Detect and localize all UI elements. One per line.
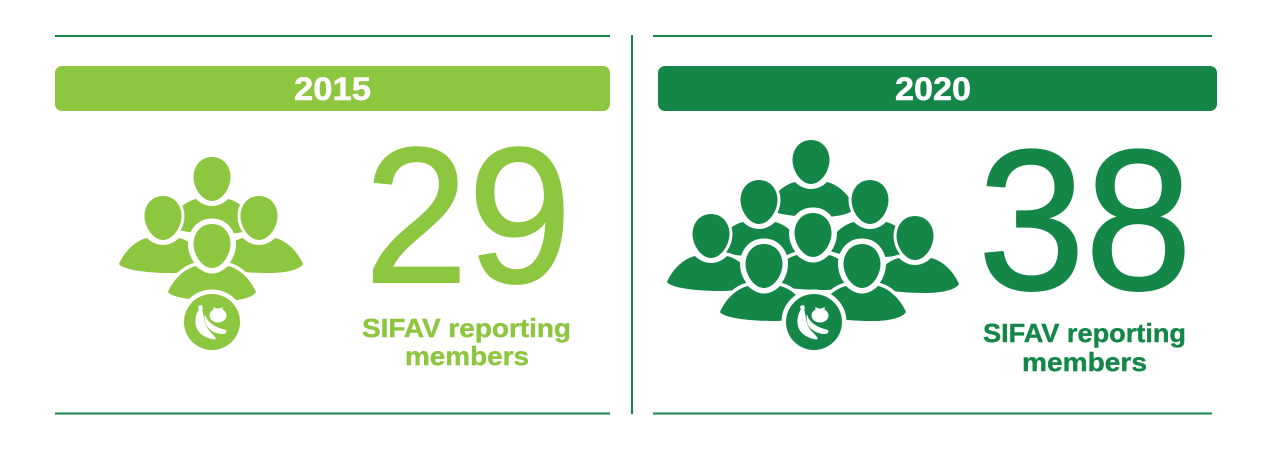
year banner: 2020 <box>658 66 1217 111</box>
icon: group of people with produce badge, 2015 <box>119 157 303 350</box>
panel: 2015 <box>55 66 610 371</box>
bottom rule: 2015 <box>55 412 610 414</box>
year banner: 2020: 2020 <box>895 71 971 107</box>
top rule: 2020 <box>653 35 1212 37</box>
icon: group of people with produce badge, 2020 <box>667 140 959 350</box>
top rule: 2015 <box>55 35 610 37</box>
year banner: 2015: 2015 <box>294 71 371 107</box>
panel: 2020 <box>658 66 1217 377</box>
caption: SIFAV reporting members, 2020: SIFAV reporting <box>983 318 1186 348</box>
big number: 29: 29 <box>364 107 572 323</box>
caption: SIFAV reporting members, 2015: SIFAV reporting <box>362 313 571 343</box>
caption: SIFAV reporting members, 2020: members <box>1022 347 1147 377</box>
centre divider <box>631 35 633 414</box>
bottom rule: 2020 <box>653 412 1212 414</box>
year banner: 2015 <box>55 66 610 111</box>
caption: SIFAV reporting members, 2015: members <box>405 341 529 371</box>
big number: 38: 38 <box>978 109 1192 332</box>
